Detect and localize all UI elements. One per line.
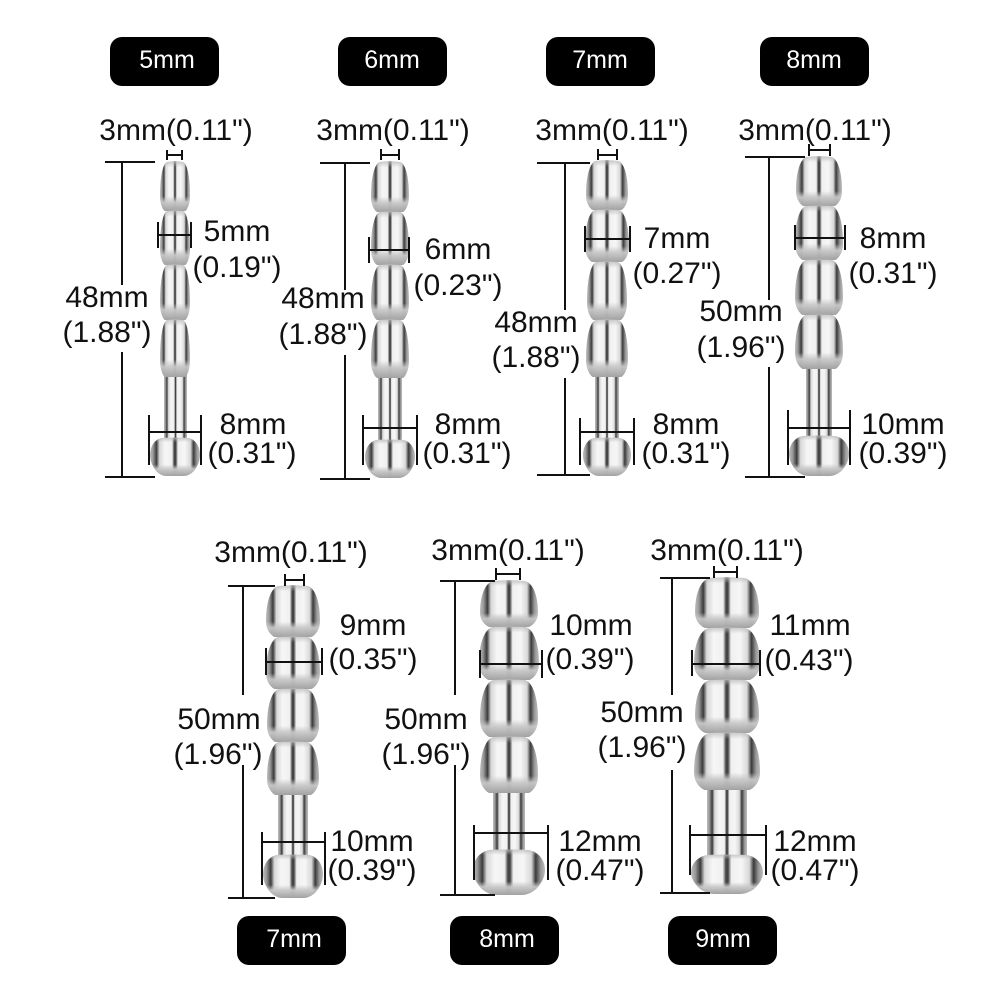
labels: rod 1: (0.19") [192,251,282,284]
labels: rod 4 [696,114,948,470]
dimension lines: rod 3 [537,149,634,475]
labels: rod 5 [173,536,418,887]
size label: 8mm: 8mm [786,46,842,74]
labels: rod 7: 50mm [600,696,684,729]
size label: bottom 8mm: 8mm [479,925,535,953]
rod 7: 9mm [691,577,763,894]
size label: 6mm [338,37,447,86]
labels: rod 4: 50mm [699,295,783,328]
labels: rod 2: (1.88") [278,318,368,351]
labels: rod 6: 50mm [384,703,468,736]
labels: rod 6: 10mm [549,609,633,642]
labels: rod 1 [62,114,297,470]
labels: rod 1: 8mm [220,408,286,441]
labels: rod 5: 10mm [330,825,414,858]
labels: rod 4: (1.96") [696,331,786,364]
labels: rod 4: (0.39") [858,437,948,470]
labels: rod 1: 3mm(0.11") [99,114,253,147]
labels: rod 3: 3mm(0.11") [535,114,689,147]
labels: rod 3: 8mm [653,408,719,441]
labels: rod 3: 7mm [644,222,710,255]
labels: rod 1: (1.88") [62,316,152,349]
labels: rod 7: (1.96") [597,731,687,764]
dimension lines: rod 2 [320,149,417,479]
labels: rod 5: (1.96") [173,738,263,771]
labels: rod 2: 3mm(0.11") [316,114,470,147]
rod 5: 7mm [263,585,323,898]
labels: rod 5: 9mm [340,609,406,642]
dimension lines: rod 7 [660,566,766,893]
labels: rod 5: 50mm [177,703,261,736]
labels: rod 7: 3mm(0.11") [650,534,804,567]
labels: rod 3: (1.88") [491,341,581,374]
dimension lines: rod 5 [228,574,325,898]
labels: rod 3: (0.27") [632,257,722,290]
size label: 7mm [546,37,655,86]
rod 6: 8mm [473,580,545,895]
rod 3: 7mm [583,160,631,476]
labels: rod 7: 12mm [773,825,857,858]
rod 1: 5mm [150,161,200,476]
labels: rod 2: 48mm [281,282,365,315]
size label: bottom 8mm [450,916,559,965]
labels: rod 2: 8mm [435,408,501,441]
labels: rod 5: 3mm(0.11") [214,536,368,569]
labels: rod 3: (0.31") [641,437,731,470]
labels: rod 4: 3mm(0.11") [738,114,892,147]
size label: bottom 7mm: 7mm [266,925,322,953]
labels: rod 4: 10mm [861,408,945,441]
labels: rod 6: (1.96") [381,738,471,771]
size label: 8mm [760,37,869,86]
dimension lines: rod 4 [745,144,850,477]
labels: rod 4: 8mm [860,222,926,255]
rod 4: 8mm [789,156,849,476]
labels: rod 5: (0.39") [327,854,417,887]
labels: rod 1: 5mm [204,215,270,248]
labels: rod 3 [491,114,731,470]
size label: 5mm [110,37,219,86]
labels: rod 2: (0.23") [413,269,503,302]
labels: rod 1: (0.31") [207,437,297,470]
labels: rod 6 [381,534,645,887]
labels: rod 7 [597,534,860,887]
labels: rod 6: 3mm(0.11") [431,534,585,567]
dimension lines: rod 1 [105,150,201,477]
labels: rod 2: (0.31") [422,437,512,470]
labels: rod 6: 12mm [558,825,642,858]
labels: rod 7: (0.43") [764,644,854,677]
labels: rod 3: 48mm [494,306,578,339]
size label: bottom 7mm [237,916,346,965]
size label: 9mm [668,916,777,965]
rod 2: 6mm [365,161,415,478]
labels: rod 2: 6mm [425,233,491,266]
labels: rod 1: 48mm [65,281,149,314]
size label: 7mm: 7mm [572,46,628,74]
labels: rod 4: (0.31") [848,257,938,290]
size label: 6mm: 6mm [364,46,420,74]
labels: rod 7: (0.47") [770,854,860,887]
labels: rod 6: (0.47") [555,854,645,887]
labels: rod 6: (0.39") [545,643,635,676]
size label: 9mm: 9mm [695,925,751,953]
dimension lines: rod 6 [440,568,548,895]
labels: rod 2 [278,114,512,470]
size label: 5mm: 5mm [139,46,195,74]
labels: rod 7: 11mm [769,609,851,642]
labels: rod 5: (0.35") [328,643,418,676]
